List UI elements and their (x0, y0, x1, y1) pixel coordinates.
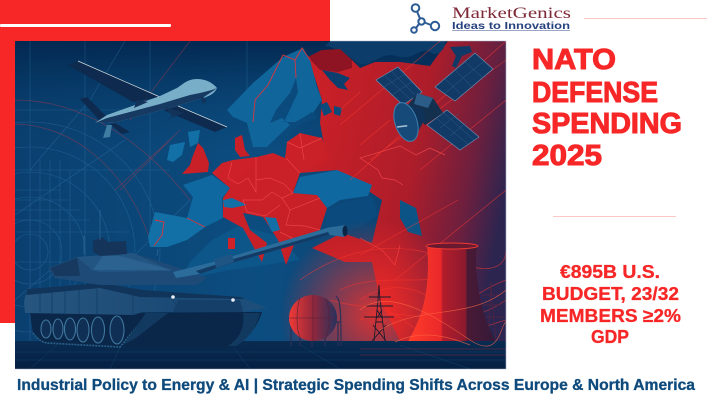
distant power pylon (480, 282, 503, 340)
satellite (376, 53, 493, 150)
map: Denmark (235, 135, 250, 157)
stat line 3: MEMBERS ≥2% (540, 305, 681, 326)
map: borders (228, 133, 445, 265)
tank track (33, 316, 146, 347)
tank headlights (171, 295, 175, 299)
drone wings (68, 61, 160, 102)
tank hull (24, 283, 267, 315)
tank glacis shadow (173, 300, 243, 312)
map: Black Sea (325, 196, 378, 232)
map: France (183, 175, 230, 227)
title line: SPENDING: SPENDING (532, 108, 682, 140)
tank (24, 210, 348, 347)
mid right divider (553, 216, 676, 217)
map: Spain (148, 212, 205, 247)
map: Switzerland (223, 198, 247, 208)
map: Ukraine (293, 170, 372, 208)
map: Bosnia (265, 217, 280, 232)
satellite dish (393, 102, 426, 142)
top vignette (15, 41, 448, 110)
map: Spain border (154, 218, 205, 246)
stat line 4: GDP (591, 326, 629, 347)
drone (68, 61, 227, 138)
spherical gas tank (289, 295, 341, 347)
title (532, 44, 682, 172)
tank wheels (41, 316, 124, 344)
logo: MarketGenics (411, 4, 571, 33)
red light streaks (300, 41, 506, 345)
tank gun barrel (173, 228, 329, 278)
map: North Africa (186, 226, 300, 276)
map: Russia and eastern territory (300, 41, 506, 341)
power pylon (364, 285, 394, 341)
energy glow (284, 224, 428, 341)
tower wave lines (360, 290, 506, 346)
white accent line (0, 24, 171, 27)
red header block (0, 0, 330, 323)
map: arctic bay (450, 46, 472, 68)
title line: 2025: 2025 (532, 140, 602, 172)
map: northwest lakes (320, 102, 342, 116)
map: Scotland (188, 130, 200, 147)
top right divider (584, 18, 707, 19)
map: Ireland (167, 142, 185, 162)
main illustration (15, 41, 506, 369)
stat line 2: BUDGET, 23/32 (542, 283, 679, 304)
title line: DEFENSE: DEFENSE (532, 77, 658, 109)
title line: NATO: NATO (532, 44, 616, 76)
tank cupola (93, 237, 127, 256)
map: Great Britain (182, 143, 209, 174)
logo name: MarketGenics (452, 5, 571, 22)
subtitle: Industrial Policy to Energy & AI | Strategic Spending Shifts Across Europe & North America (17, 377, 695, 394)
stat line 1: €895B U.S. (560, 261, 660, 282)
map: Caspian Sea (400, 200, 422, 236)
map: Baltic sea (268, 78, 318, 146)
illustration edge (15, 41, 506, 369)
ground plane (15, 341, 506, 369)
red radar arcs (15, 41, 190, 240)
map: dark northern cap (308, 49, 352, 72)
map: Sardinia (228, 238, 235, 249)
map: White Sea (322, 70, 350, 90)
radar grid background (15, 41, 248, 341)
drone tail (80, 97, 107, 121)
map: arctic sea (325, 41, 445, 64)
satellite body (408, 93, 443, 125)
satellite solar panels (376, 53, 493, 150)
tank turret (48, 253, 207, 285)
map: Scandinavia border (253, 48, 310, 122)
map: central Europe (212, 133, 330, 265)
key statistic (540, 261, 681, 347)
satellite panel grid (382, 61, 484, 145)
map: Scandinavia (227, 48, 322, 147)
cooling tower (408, 243, 495, 341)
logo tagline: Ideas to Innovation (452, 20, 570, 32)
tank lower body (30, 312, 262, 347)
drone landing gear (134, 96, 207, 119)
drone fuselage (95, 79, 217, 123)
icon: molecule (411, 4, 439, 33)
map of Europe (148, 41, 506, 341)
tank antenna (84, 210, 158, 256)
